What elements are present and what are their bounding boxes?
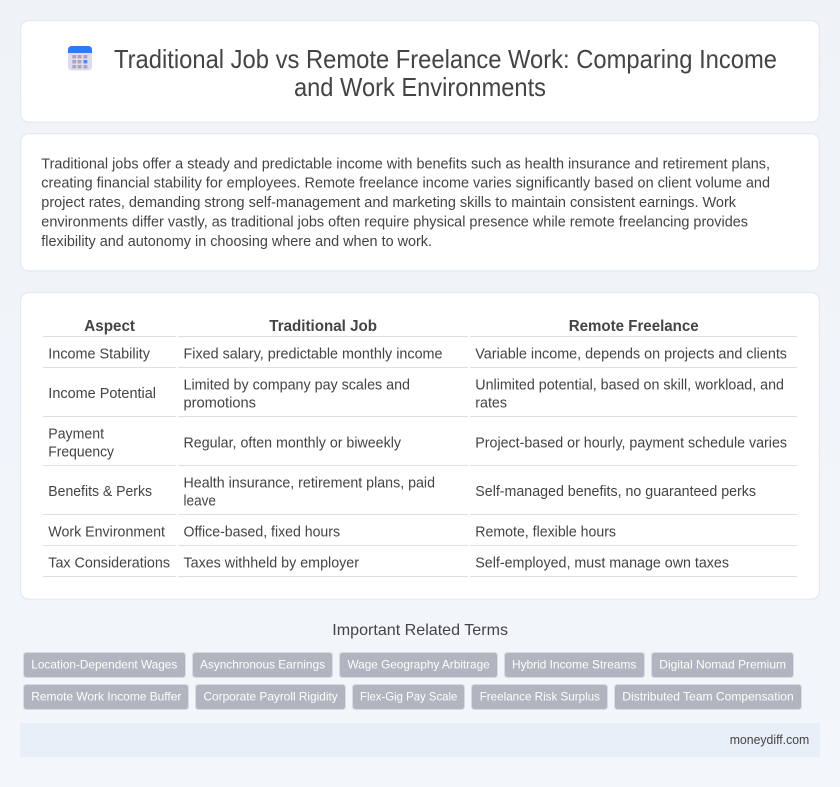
row: work environment: Remote, flexible hours <box>475 524 616 540</box>
tag <box>24 684 188 710</box>
row: work environment: Office-based, fixed hours <box>184 524 340 540</box>
tag: Digital Nomad Premium <box>659 658 786 672</box>
row: tax considerations: Taxes withheld by employer <box>184 555 359 571</box>
row: income potential: rates <box>475 395 507 411</box>
row: work environment <box>43 524 797 546</box>
row: benefits and perks: Health insurance, retirement plans, paid <box>184 475 435 491</box>
tag: Asynchronous Earnings <box>200 658 325 672</box>
row: income stability: Fixed salary, predictable monthly income <box>184 346 442 362</box>
tag: Flex-Gig Pay Scale <box>360 690 458 704</box>
row: income potential: Income Potential <box>48 386 156 402</box>
row: payment frequency: Project-based or hourly, payment schedule varies <box>475 435 787 451</box>
panel: title card <box>21 21 819 122</box>
row: tax considerations: Self-employed, must manage own taxes <box>475 555 729 571</box>
title <box>114 46 777 102</box>
tag <box>192 652 332 678</box>
panel: comparison table <box>21 293 819 599</box>
title: Traditional Job vs Remote Freelance Work: Comparing Income <box>114 46 777 74</box>
summary text block: Traditional jobs offer a steady and predictable income with benefits such as health insurance and retirement plans, <box>41 156 770 172</box>
summary text block: flexibility and autonomy in choosing where and when to work. <box>41 234 432 250</box>
tag: Location-Dependent Wages <box>31 658 177 672</box>
tag: Freelance Risk Surplus <box>480 690 600 704</box>
heading: related terms: Important Related Terms <box>332 622 508 639</box>
row: payment frequency <box>43 426 797 466</box>
tag <box>24 652 186 678</box>
row: tax considerations <box>43 555 797 577</box>
table header row: Remote Freelance <box>569 318 699 335</box>
row: benefits and perks: Benefits & Perks <box>48 484 152 500</box>
summary text block <box>41 156 770 250</box>
footer bar: moneydiff.com <box>730 732 809 747</box>
panel: summary <box>21 134 819 271</box>
row: payment frequency: Regular, often monthly or biweekly <box>184 435 402 451</box>
table header row: Traditional Job <box>269 318 377 335</box>
tag: Hybrid Income Streams <box>512 658 636 672</box>
row: income potential: Unlimited potential, based on skill, workload, and <box>475 377 784 393</box>
row: benefits and perks: leave <box>184 493 216 509</box>
title: and Work Environments <box>294 74 546 102</box>
table header row: Aspect <box>84 318 136 335</box>
row: benefits and perks: Self-managed benefits, no guaranteed perks <box>475 484 756 500</box>
tag <box>504 652 644 678</box>
tag: Corporate Payroll Rigidity <box>204 690 338 704</box>
row: benefits and perks <box>43 475 797 515</box>
tag: Distributed Team Compensation <box>622 690 794 704</box>
summary text block: project rates, demanding strong self-management and marketing skills to maintain consistent earnings. Work <box>41 195 737 211</box>
row: payment frequency: Frequency <box>48 444 115 460</box>
row: income stability: Variable income, depends on projects and clients <box>475 346 787 362</box>
footer bar <box>20 723 820 757</box>
tag <box>614 684 802 710</box>
tag <box>196 684 346 710</box>
tag <box>652 652 794 678</box>
tag: Wage Geography Arbitrage <box>348 658 490 672</box>
tag <box>352 684 464 710</box>
table header row <box>43 318 797 337</box>
tag: Remote Work Income Buffer <box>31 690 181 704</box>
summary text block: environments differ vastly, as traditional jobs often require physical presence while remote freelancing provides <box>41 215 748 231</box>
related term tags <box>24 652 802 710</box>
tag <box>340 652 498 678</box>
summary text block: creating financial stability for employees. Remote freelance income varies significantly based on client volume and <box>41 176 770 192</box>
tag <box>472 684 608 710</box>
row: income stability <box>43 346 797 368</box>
row: income potential <box>43 377 797 417</box>
icon: calendar <box>68 46 92 70</box>
row: payment frequency: Payment <box>48 426 104 442</box>
row: income potential: Limited by company pay scales and <box>184 377 410 393</box>
row: work environment: Work Environment <box>48 524 165 540</box>
row: tax considerations: Tax Considerations <box>48 555 170 571</box>
row: income potential: promotions <box>184 395 256 411</box>
row: income stability: Income Stability <box>48 346 151 362</box>
